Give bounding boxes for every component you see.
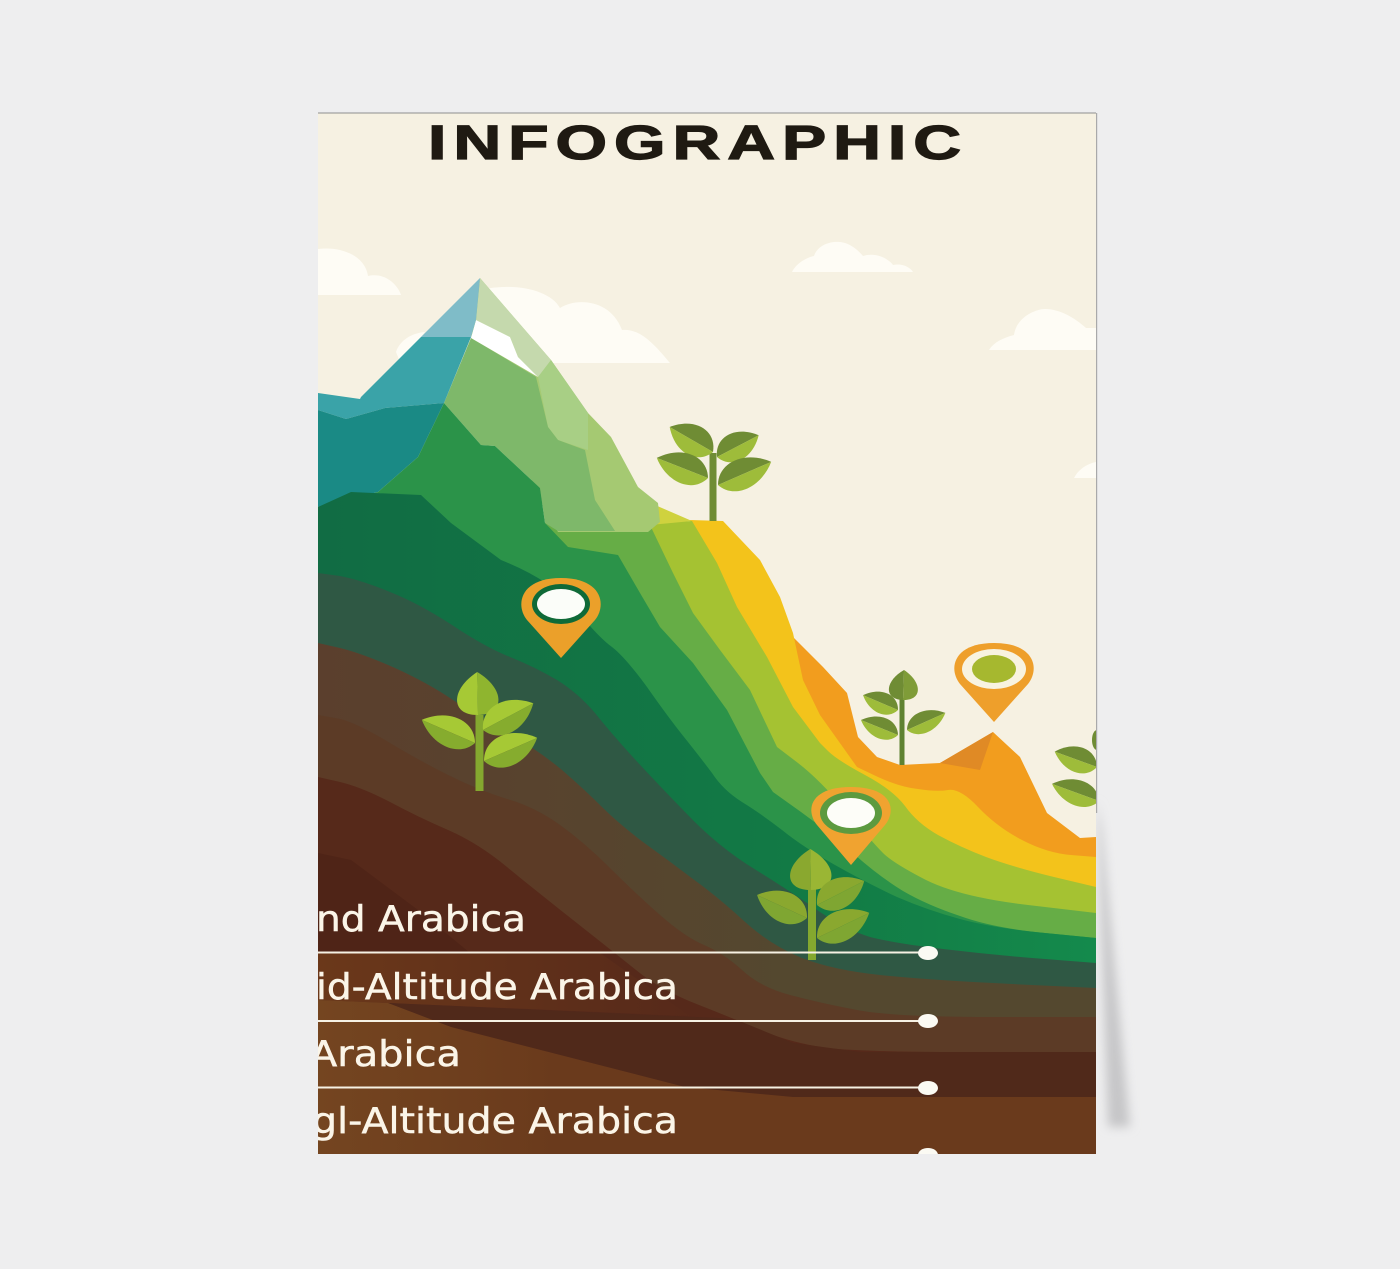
layer: warm brown band (318, 954, 554, 1010)
label text 4: gl-Altitude Arabica (312, 1101, 678, 1142)
layer: mid green (545, 523, 1096, 938)
dot 3 (918, 1081, 938, 1095)
facet: light green slope (444, 338, 615, 531)
cloud: small right (1074, 462, 1096, 478)
layer: brown (358, 726, 1096, 1052)
facet: orange shade (940, 732, 993, 770)
facet: pale summit (476, 278, 551, 377)
poster right edge (1096, 113, 1097, 813)
label text 2: id-Altitude Arabica (316, 967, 678, 1008)
icon: map pin on green (521, 578, 601, 658)
layer: bottom brown (318, 1000, 1096, 1154)
layer: orange (794, 638, 1096, 857)
label row 4 (312, 1101, 938, 1162)
label text 3: Arabica (310, 1034, 461, 1075)
icon: sprout on orange valley (857, 670, 950, 765)
dot 1 (918, 946, 938, 960)
sky (318, 114, 1096, 838)
facet: snow (471, 320, 538, 377)
dot 4 (918, 1148, 938, 1162)
facet: mountain backing (471, 278, 660, 532)
cloud: behind mountain (396, 287, 670, 363)
facet: teal (318, 337, 471, 419)
facet: pale green upper slope (538, 360, 588, 450)
label text 1: nd Arabica (316, 899, 526, 940)
layer: olive brown (318, 643, 1096, 1017)
layer: dark brown (318, 777, 922, 1052)
leader line 1 (318, 952, 924, 954)
label row 2 (316, 967, 938, 1028)
poster curl shadow (1097, 800, 1130, 1127)
label row 3 (310, 1034, 938, 1095)
title: INFOGRAPHIC (428, 117, 968, 170)
layer: deep brown wedge (392, 1003, 832, 1048)
layer: darkest brown patch (318, 853, 470, 953)
cloud: left (318, 248, 401, 295)
cloud: top right (792, 242, 913, 272)
facet: dark teal (318, 403, 444, 507)
facet: yellow-green ridge (657, 506, 692, 524)
layer: green (318, 403, 1095, 938)
icon: sprout at right edge (1052, 730, 1096, 807)
dot 2 (918, 1014, 938, 1028)
layer: lime (652, 521, 1096, 913)
leader line 3 (318, 1086, 924, 1088)
layer: dark green (318, 573, 1096, 988)
icon: map pin on slope (811, 787, 891, 865)
icon: sprout on ridge (656, 424, 772, 521)
facet: pale teal summit (421, 278, 480, 337)
clouds (318, 242, 1096, 478)
cloud: right (989, 309, 1096, 350)
layer: yellow (690, 520, 1096, 887)
label row 1 (316, 899, 938, 960)
icon: map pin above peak (954, 643, 1034, 722)
icon: sprout by line (757, 849, 870, 960)
poster (310, 113, 1103, 1162)
poster top edge (318, 112, 1096, 114)
leader line 2 (318, 1020, 924, 1022)
icon: large sprout (416, 672, 543, 791)
layer: deep green (318, 492, 1096, 963)
mountain and terrain layers (318, 278, 1096, 1154)
